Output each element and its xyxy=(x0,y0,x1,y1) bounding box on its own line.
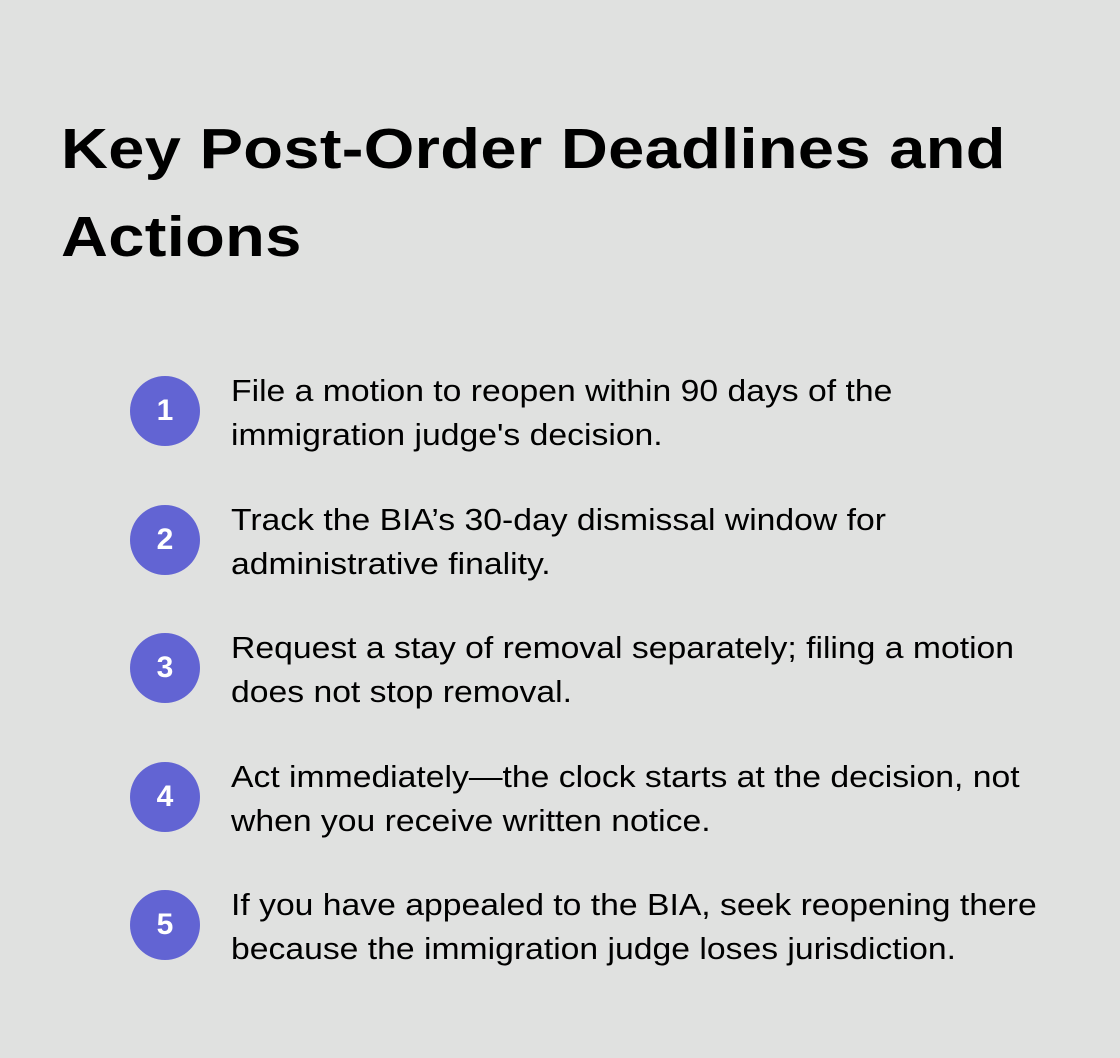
item 2 xyxy=(130,503,886,581)
text 3: Request a stay of removal separately; filing a motion xyxy=(231,631,1014,665)
text 1: immigration judge's decision. xyxy=(231,418,663,452)
item 5 xyxy=(130,888,1037,966)
text 5: If you have appealed to the BIA, seek reopening there xyxy=(231,888,1037,922)
item 1 xyxy=(130,374,892,452)
badge 3: 3 xyxy=(157,651,173,684)
text 3: does not stop removal. xyxy=(231,675,572,709)
badge 2 xyxy=(130,505,200,575)
item 3 xyxy=(130,631,1014,709)
text 1: File a motion to reopen within 90 days of the xyxy=(231,374,892,408)
text 5 xyxy=(231,888,1037,966)
text 3 xyxy=(231,631,1014,709)
text 5: because the immigration judge loses jurisdiction. xyxy=(231,932,956,966)
text 2: Track the BIA’s 30-day dismissal window for xyxy=(231,503,886,537)
text 2 xyxy=(231,503,886,581)
badge 5 xyxy=(130,890,200,960)
text 4: Act immediately—the clock starts at the decision, not xyxy=(231,760,1020,794)
badge 4 xyxy=(130,762,200,832)
text 4: when you receive written notice. xyxy=(231,804,711,838)
badge 5: 5 xyxy=(157,908,173,941)
title: Key Post-Order Deadlines and xyxy=(61,117,1006,181)
text 2: administrative finality. xyxy=(231,547,551,581)
title xyxy=(61,117,1006,269)
badge 2: 2 xyxy=(157,523,173,556)
item 4 xyxy=(130,760,1020,838)
badge 1 xyxy=(130,376,200,446)
text 1 xyxy=(231,374,892,452)
badge 4: 4 xyxy=(157,780,173,813)
text 4 xyxy=(231,760,1020,838)
list of deadlines xyxy=(130,374,1037,966)
title: Actions xyxy=(61,205,302,269)
badge 1: 1 xyxy=(157,394,173,427)
badge 3 xyxy=(130,633,200,703)
